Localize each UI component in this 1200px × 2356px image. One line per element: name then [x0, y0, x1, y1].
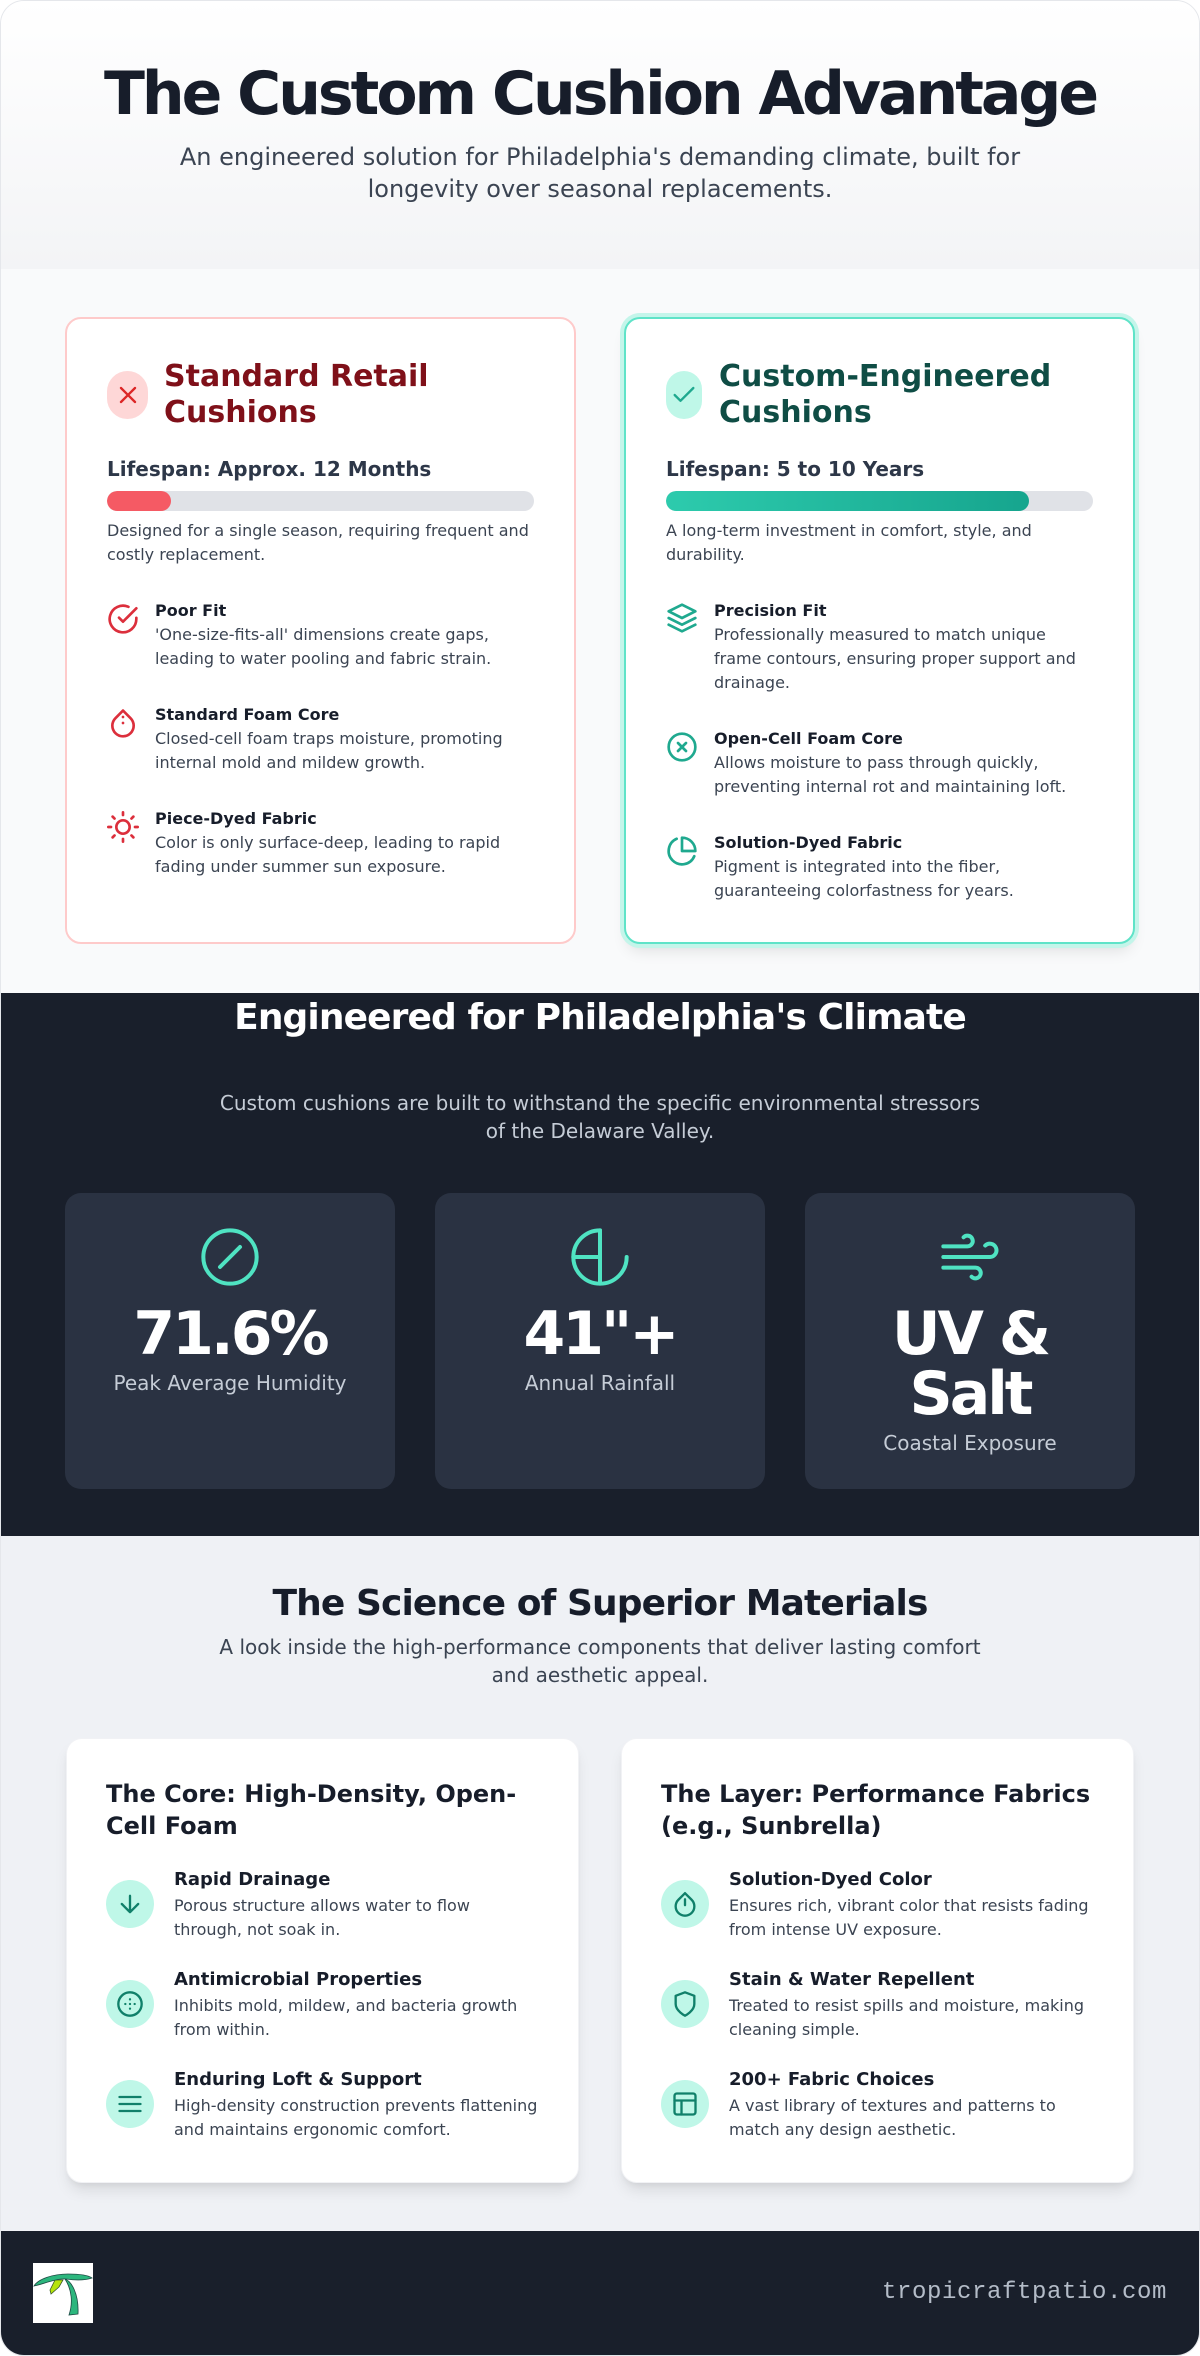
- stat card: rainfall: Annual Rainfall: [525, 1371, 675, 1395]
- stat card: uv and salt: Coastal Exposure: [883, 1431, 1057, 1455]
- feature: open-cell foam core: preventing internal rot and maintaining loft.: [714, 777, 1066, 796]
- item: antimicrobial properties: Antimicrobial Properties: [174, 1969, 422, 1990]
- header band: [0, 0, 1200, 269]
- stat card: humidity: 71.6%: [133, 1299, 327, 1369]
- item: stain and water repellent: cleaning simple.: [729, 2020, 860, 2039]
- icon: rain gauge: [571, 1228, 629, 1286]
- item: rapid drainage: Porous structure allows water to flow: [174, 1896, 470, 1915]
- lifespan description: [666, 521, 1032, 564]
- icon: pie chart: [667, 836, 697, 866]
- stat card: humidity: Peak Average Humidity: [113, 1371, 347, 1395]
- stat card: uv and salt: UV &: [892, 1299, 1048, 1369]
- feature: solution-dyed fabric: [667, 833, 1014, 900]
- card heading: Cushions: [719, 395, 872, 430]
- feature: standard foam core: internal mold and mildew growth.: [155, 753, 425, 772]
- core heading: The Core: High-Density, Open-: [106, 1780, 516, 1808]
- icon: check circle: [108, 604, 138, 634]
- item: rapid drainage: through, not soak in.: [174, 1920, 340, 1939]
- item: fabric choices: 200+ Fabric Choices: [729, 2069, 934, 2090]
- icon: sun: [107, 811, 139, 843]
- feature: standard foam core: [111, 705, 503, 772]
- subtitle: longevity over seasonal replacements.: [368, 175, 832, 203]
- card heading: [107, 359, 429, 430]
- feature: piece-dyed fabric: Color is only surface-deep, leading to rapid: [155, 833, 500, 852]
- feature: precision fit: Precision Fit: [714, 601, 826, 620]
- item: enduring loft and support: [106, 2069, 537, 2139]
- item: antimicrobial properties: from within.: [174, 2020, 270, 2039]
- core heading: [106, 1780, 516, 1840]
- stat card: uv and salt: [805, 1193, 1135, 1489]
- lifespan label: Lifespan: 5 to 10 Years: [666, 457, 924, 481]
- lifespan description: Designed for a single season, requiring frequent and: [107, 521, 529, 540]
- item: enduring loft and support: High-density construction prevents flattening: [174, 2096, 537, 2115]
- title: The Custom Cushion Advantage: [104, 59, 1096, 129]
- lifespan label: Lifespan: Approx. 12 Months: [107, 457, 431, 481]
- card heading: Standard Retail: [164, 359, 429, 394]
- climate heading: Engineered for Philadelphia's Climate: [234, 997, 966, 1038]
- card heading: Custom-Engineered: [719, 359, 1051, 394]
- feature: piece-dyed fabric: fading under summer sun exposure.: [155, 857, 446, 876]
- item: enduring loft and support: Enduring Loft & Support: [174, 2069, 422, 2090]
- lifespan description: A long-term investment in comfort, style, and: [666, 521, 1032, 540]
- feature: standard foam core: Standard Foam Core: [155, 705, 339, 724]
- stat card: rainfall: [435, 1193, 765, 1489]
- item: enduring loft and support: and maintains ergonomic comfort.: [174, 2120, 451, 2139]
- item: stain and water repellent: Treated to resist spills and moisture, making: [729, 1996, 1084, 2015]
- feature: piece-dyed fabric: Piece-Dyed Fabric: [155, 809, 317, 828]
- item: solution-dyed color: Ensures rich, vibrant color that resists fading: [729, 1896, 1089, 1915]
- icon: x circle: [667, 732, 697, 762]
- item: fabric choices: [661, 2069, 1056, 2139]
- feature: standard foam core: Closed-cell foam traps moisture, promoting: [155, 729, 503, 748]
- item: stain and water repellent: Stain & Water Repellent: [729, 1969, 974, 1990]
- icon: droplet: [661, 1880, 709, 1928]
- feature: precision fit: drainage.: [714, 673, 790, 692]
- item: rapid drainage: [106, 1869, 470, 1939]
- feature: solution-dyed fabric: guaranteeing colorfastness for years.: [714, 881, 1014, 900]
- icon: wind: [941, 1234, 998, 1280]
- stat card: humidity: [65, 1193, 395, 1489]
- card heading: Cushions: [164, 395, 317, 430]
- item: fabric choices: A vast library of textures and patterns to: [729, 2096, 1056, 2115]
- lifespan description: costly replacement.: [107, 545, 265, 564]
- item: antimicrobial properties: Inhibits mold, mildew, and bacteria growth: [174, 1996, 517, 2015]
- panel: climate section: [0, 993, 1200, 1536]
- feature: solution-dyed fabric: Pigment is integrated into the fiber,: [714, 857, 1000, 876]
- feature: poor fit: 'One-size-fits-all' dimensions create gaps,: [155, 625, 489, 644]
- icon: gauge circle: [201, 1228, 259, 1286]
- lifespan description: durability.: [666, 545, 745, 564]
- climate subheading: Custom cushions are built to withstand the specific environmental stressors: [220, 1091, 980, 1115]
- icon: check mark: [666, 371, 702, 419]
- lifespan bar: [666, 491, 1093, 511]
- subtitle: An engineered solution for Philadelphia's demanding climate, built for: [180, 143, 1020, 171]
- panel: the core: [66, 1738, 579, 2183]
- lifespan bar: [107, 491, 534, 511]
- item: solution-dyed color: [661, 1869, 1089, 1939]
- feature: poor fit: Poor Fit: [155, 601, 226, 620]
- icon: shield: [661, 1980, 709, 2028]
- feature: open-cell foam core: Allows moisture to pass through quickly,: [714, 753, 1038, 772]
- materials subheading: [219, 1635, 981, 1687]
- materials heading: The Science of Superior Materials: [272, 1583, 928, 1624]
- item: rapid drainage: Rapid Drainage: [174, 1869, 330, 1890]
- core heading: Cell Foam: [106, 1812, 238, 1840]
- materials subheading: A look inside the high-performance components that deliver lasting comfort: [219, 1635, 981, 1659]
- layer heading: (e.g., Sunbrella): [661, 1812, 882, 1840]
- item: antimicrobial properties: [106, 1969, 517, 2039]
- item: solution-dyed color: Solution-Dyed Color: [729, 1869, 932, 1890]
- icon: layers: [667, 603, 697, 633]
- icon: dotted circle: [106, 1980, 154, 2028]
- feature: poor fit: leading to water pooling and fabric strain.: [155, 649, 491, 668]
- item: fabric choices: match any design aesthetic.: [729, 2120, 956, 2139]
- card heading: [666, 359, 1051, 430]
- materials subheading: and aesthetic appeal.: [492, 1663, 708, 1687]
- icon: arrow down: [106, 1880, 154, 1928]
- panel: the layer: [621, 1738, 1134, 2183]
- feature: open-cell foam core: Open-Cell Foam Core: [714, 729, 903, 748]
- climate subheading: of the Delaware Valley.: [486, 1119, 714, 1143]
- logo: palm tree: [33, 2263, 93, 2323]
- stat card: uv and salt: Salt: [910, 1359, 1030, 1429]
- footer: [0, 2231, 1200, 2356]
- layer heading: [661, 1780, 1090, 1840]
- feature: solution-dyed fabric: Solution-Dyed Fabric: [714, 833, 902, 852]
- icon: x mark: [107, 371, 148, 419]
- item: solution-dyed color: from intense UV exposure.: [729, 1920, 942, 1939]
- icon: stacked lines: [106, 2080, 154, 2128]
- panel: materials section: [0, 1536, 1200, 2231]
- feature: open-cell foam core: [667, 729, 1066, 796]
- panel: custom-engineered cushions: [624, 317, 1135, 944]
- feature: precision fit: Professionally measured to match unique: [714, 625, 1046, 644]
- subtitle: [180, 143, 1020, 203]
- layer heading: The Layer: Performance Fabrics: [661, 1780, 1090, 1808]
- icon: layout: [661, 2080, 709, 2128]
- icon: droplet: [111, 709, 135, 738]
- feature: poor fit: [108, 601, 491, 668]
- website url: tropicraftpatio.com: [882, 2279, 1167, 2306]
- stat card: rainfall: 41"+: [523, 1299, 677, 1369]
- feature: precision fit: frame contours, ensuring proper support and: [714, 649, 1076, 668]
- panel: standard retail cushions: [65, 317, 576, 944]
- lifespan description: [107, 521, 529, 564]
- feature: piece-dyed fabric: [107, 809, 500, 876]
- climate subheading: [220, 1091, 980, 1143]
- feature: precision fit: [667, 601, 1076, 692]
- item: stain and water repellent: [661, 1969, 1084, 2039]
